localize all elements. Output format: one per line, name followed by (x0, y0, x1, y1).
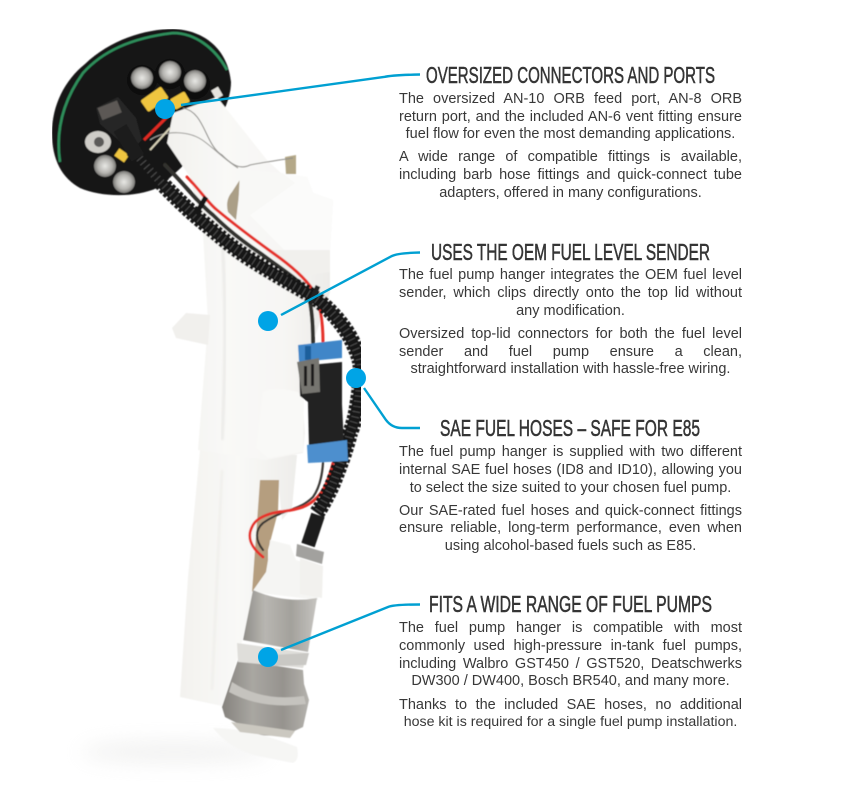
section: wide range of fuel pumps (399, 591, 742, 730)
body text (399, 91, 742, 201)
fuel pump (222, 590, 317, 736)
body text: The fuel pump hanger integrates the OEM fuel level (399, 267, 742, 283)
body text: including Walbro GST450 / GST520, Deatschwerks (399, 656, 742, 672)
corrugated hose (120, 128, 361, 513)
upper block shading (240, 173, 333, 256)
port washer (85, 131, 111, 153)
body text: sender, which clips directly onto the top lid without (399, 285, 742, 301)
hose clamp (296, 544, 324, 564)
rubber hose end (308, 515, 318, 545)
hanger assembly (52, 29, 361, 763)
sensor wires (183, 108, 293, 167)
body text: A wide range of compatible fittings is available, (399, 149, 742, 165)
body text: fuel flow for even the most demanding applications. (406, 126, 735, 142)
body text: Our SAE-rated fuel hoses and quick-connect fittings (399, 503, 742, 519)
body text (399, 620, 742, 730)
heading: USES THE OEM FUEL LEVEL SENDER (431, 239, 710, 265)
heading: SAE FUEL HOSES – SAFE FOR E85 (440, 415, 700, 441)
section: oversized connectors (399, 62, 742, 201)
body text: The fuel pump hanger is compatible with most (399, 620, 742, 636)
body text (399, 444, 742, 554)
body text: hose kit is required for a single fuel pump installation. (404, 714, 737, 730)
body text: Oversized top-lid connectors for both the fuel level (399, 326, 742, 342)
body text: commonly used high-pressure in-tank fuel pumps, (399, 638, 742, 654)
yellow terminals (114, 86, 190, 163)
terminal bolts (94, 59, 210, 193)
raised rib (256, 389, 304, 458)
electrical connector (297, 340, 348, 463)
sender clip (227, 155, 296, 220)
ground shadow (80, 742, 270, 762)
body text: sender and fuel pump ensure a clean, (399, 344, 742, 360)
brown window (252, 480, 279, 592)
top fitting (252, 540, 318, 600)
body text: any modification. (516, 303, 625, 319)
body text: The fuel pump hanger is supplied with two different (399, 444, 742, 460)
body text (399, 267, 742, 377)
heading: FITS A WIDE RANGE OF FUEL PUMPS (429, 591, 712, 617)
body text: adapters, offered in many configurations. (439, 185, 702, 201)
side tab (172, 313, 210, 345)
strainer (213, 728, 298, 763)
section: OEM fuel level sender (399, 239, 742, 377)
upper main body (167, 97, 333, 460)
section: SAE fuel hoses (399, 415, 742, 554)
body text: to select the size suited to your chosen fuel pump. (410, 480, 731, 496)
body text: DW300 / DW400, Bosch BR540, and many more. (411, 673, 730, 689)
body text: using alcohol-based fuels such as E85. (445, 538, 696, 554)
body text: Thanks to the included SAE hoses, no additional (399, 697, 742, 713)
body text: The oversized AN-10 ORB feed port, AN-8 ORB (399, 91, 742, 107)
wires along hose (165, 165, 333, 557)
body text: return port, and the included AN-6 vent fitting ensure (399, 108, 742, 124)
lower tube (180, 450, 297, 706)
red wire top (144, 116, 168, 140)
body text: ensure reliable, long-term performance, even when (399, 520, 742, 536)
marker dots (155, 99, 366, 667)
body text: including barb hose fittings and quick-connect tube (399, 167, 742, 183)
body text: straightforward installation with hassle-free wiring. (411, 361, 730, 377)
white terminal (211, 87, 223, 99)
mounting disc (52, 29, 231, 195)
leader lines (181, 74, 420, 650)
body text: internal SAE fuel hoses (ID8 and ID10), allowing you (399, 462, 742, 478)
side connector (96, 97, 142, 152)
cable ties (196, 197, 206, 214)
